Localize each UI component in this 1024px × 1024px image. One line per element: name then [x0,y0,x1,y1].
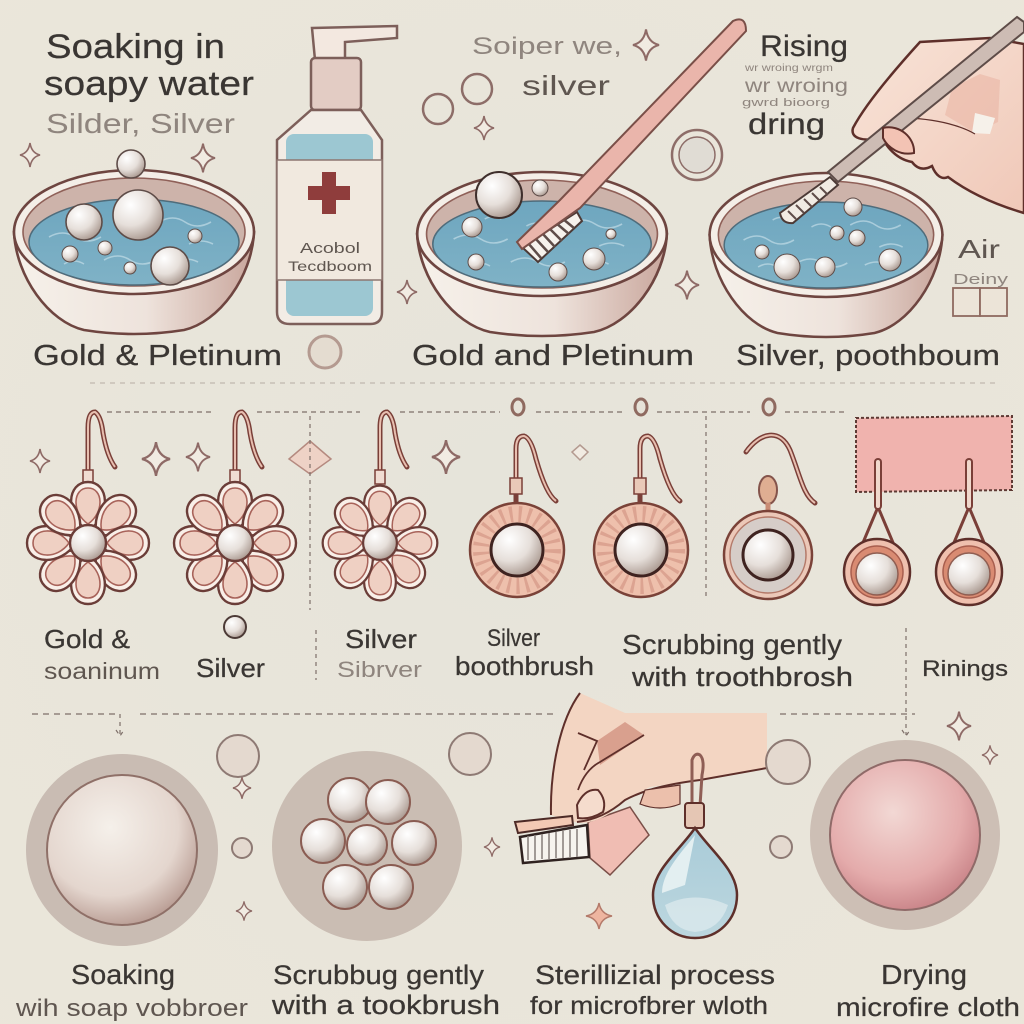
icon: first bowl with pearls [14,150,254,334]
heading: soaper silver: silver [522,70,610,101]
captions: earring labels [44,616,1008,692]
captions: bottom labels: Drying [881,959,967,990]
icon: flower earring 2 [174,412,296,604]
captions: bottom labels: wih soap vobbroer [15,995,248,1022]
icon: flower earring 3 [323,412,437,600]
captions: earring labels: soaninum [44,658,160,684]
captions: bottom labels: Sterillizial process [535,960,775,990]
text: air drying: Air [958,234,1000,264]
panel: top row soaking steps [14,17,1024,372]
heading: rising drying: gwrd bioorg [742,97,830,109]
icon: round earring 1 [470,399,564,597]
captions: bottom labels: Soaking [71,959,175,990]
heading: soaper silver [472,33,622,101]
icon: alcohol bottle [277,26,397,324]
icon: second bowl [417,172,667,336]
heading: soaking in soapy water: Silder, Silver [46,108,235,139]
heading: rising drying: wr wroing wrgm [744,63,833,74]
icon: bottom sparkles [233,712,998,929]
icon: flower earring 1 [27,412,149,604]
dashed dividers and arrows [32,416,915,736]
label row: top captions [33,336,1000,372]
heading: rising drying: dring [748,108,825,141]
icon: pink earring left [844,462,910,605]
captions: earring labels: Silver [487,625,540,652]
icon: third bowl [710,173,942,337]
captions: earring labels: Rinings [922,656,1008,681]
heading: soaking in soapy water [44,28,254,139]
icon: small rings [423,74,722,180]
icon: round earring 3 [724,399,815,599]
icon: sparkles near first bowl [20,143,215,172]
captions: earring labels: with troothbrosh [631,662,853,692]
icon: alcohol bottle: Tecdboom [288,258,372,274]
captions: earring labels: Gold & [44,624,130,654]
icon: pink cloth held by hand [588,807,649,875]
heading: rising drying [742,30,848,141]
icon: pearl cluster [272,751,462,941]
icon: pink earring right [936,462,1002,605]
text: air drying: Deiny [953,271,1009,288]
icon: hand with brush [780,17,1024,223]
label row: top captions: Silver, poothboum [736,340,1000,372]
captions: bottom labels: microfire cloth [836,992,1020,1022]
icon: round earring 2 [594,399,688,597]
icon: pink pearl [810,740,1000,930]
captions: earring labels: Sibrver [337,657,422,682]
heading: soaper silver: Soiper we, [472,33,622,60]
panel: earrings row [27,399,1012,692]
captions: earring labels: Scrubbing gently [622,629,842,660]
captions: earring labels: boothbrush [455,651,594,681]
heading: rising drying: wr wroing [744,76,848,97]
text: air drying [953,234,1009,288]
icon: pink cloth [856,416,1012,492]
icon: sparkles near second heading [397,29,699,304]
icon: hand holding brush [551,693,767,823]
icon: water drop earring [653,754,737,938]
icon: sparkles [30,440,588,476]
icon: alcohol bottle: Acobol [300,240,360,257]
heading: rising drying: Rising [760,30,848,63]
label row: top captions: Gold & Pletinum [33,340,282,372]
captions: bottom labels [15,959,1020,1022]
icon: small badges [217,733,810,858]
captions: bottom labels: Scrubbug gently [273,960,485,990]
captions: earring labels: Silver [345,624,417,654]
icon: white toothbrush [515,816,589,863]
captions: bottom labels: for microfbrer wloth [530,992,768,1020]
divider [90,382,1000,384]
icon: small book [953,288,1007,316]
icon: pink toothbrush [517,19,746,262]
dashed guide lines [107,411,845,413]
captions: bottom labels: with a tookbrush [271,990,500,1020]
label row: top captions: Gold and Pletinum [412,340,694,372]
panel: bottom row [15,693,1020,1022]
heading: soaking in soapy water: Soaking in [46,28,225,66]
icon: large pearl [26,754,218,946]
captions: earring labels: Silver [196,653,265,683]
heading: soaking in soapy water: soapy water [44,65,254,103]
